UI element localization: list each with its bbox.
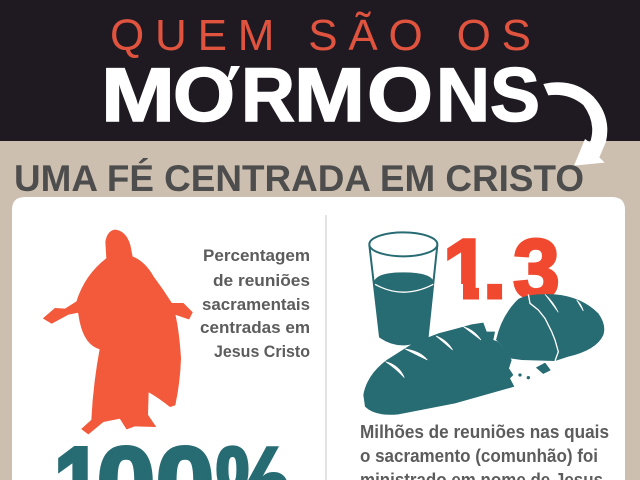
title: Mórmons: N [436,53,490,138]
title: Mórmons: O [173,53,235,138]
text: sacrament description [360,422,609,480]
text: percentage description: centradas em [200,318,310,337]
title: Mórmons: O [367,53,433,138]
title: Mórmons: R [241,53,295,138]
text: percentage description: sacramentais [202,295,310,314]
stat: 1.3 [438,222,560,316]
title: Mórmons [101,53,540,138]
stat: 100% [54,427,290,480]
title: Mórmons: S [490,53,540,138]
title: Mórmons: M [294,53,365,138]
stat: 1.3: 3 [513,222,560,316]
icon: glass [369,232,437,344]
text: percentage description [200,246,310,361]
stat: 1.3: . [483,222,506,316]
icon: bread right [496,294,604,379]
icon: bread left [363,323,514,415]
divider [326,215,327,480]
icon: glass and bread [363,232,604,415]
title: Quem são os: QUEM SÃO OS [110,10,531,60]
stat: 1.3: 1 [443,222,490,316]
panel: white card [12,197,625,480]
text: percentage description: Percentagem [203,246,310,265]
title: Mórmons: M [101,53,175,138]
arrow [543,82,607,166]
text: sacrament description: Milhões de reuniões nas quais [360,422,609,442]
text: percentage description: Jesus Cristo [214,342,310,361]
text: percentage description: de reuniões [213,271,310,290]
tan background [0,141,640,480]
text: sacrament description: o sacramento (comunhão) foi [360,446,598,466]
heading: UMA FÉ CENTRADA EM CRISTO [14,158,584,199]
icon: Jesus silhouette [43,230,192,434]
header band [0,0,640,141]
